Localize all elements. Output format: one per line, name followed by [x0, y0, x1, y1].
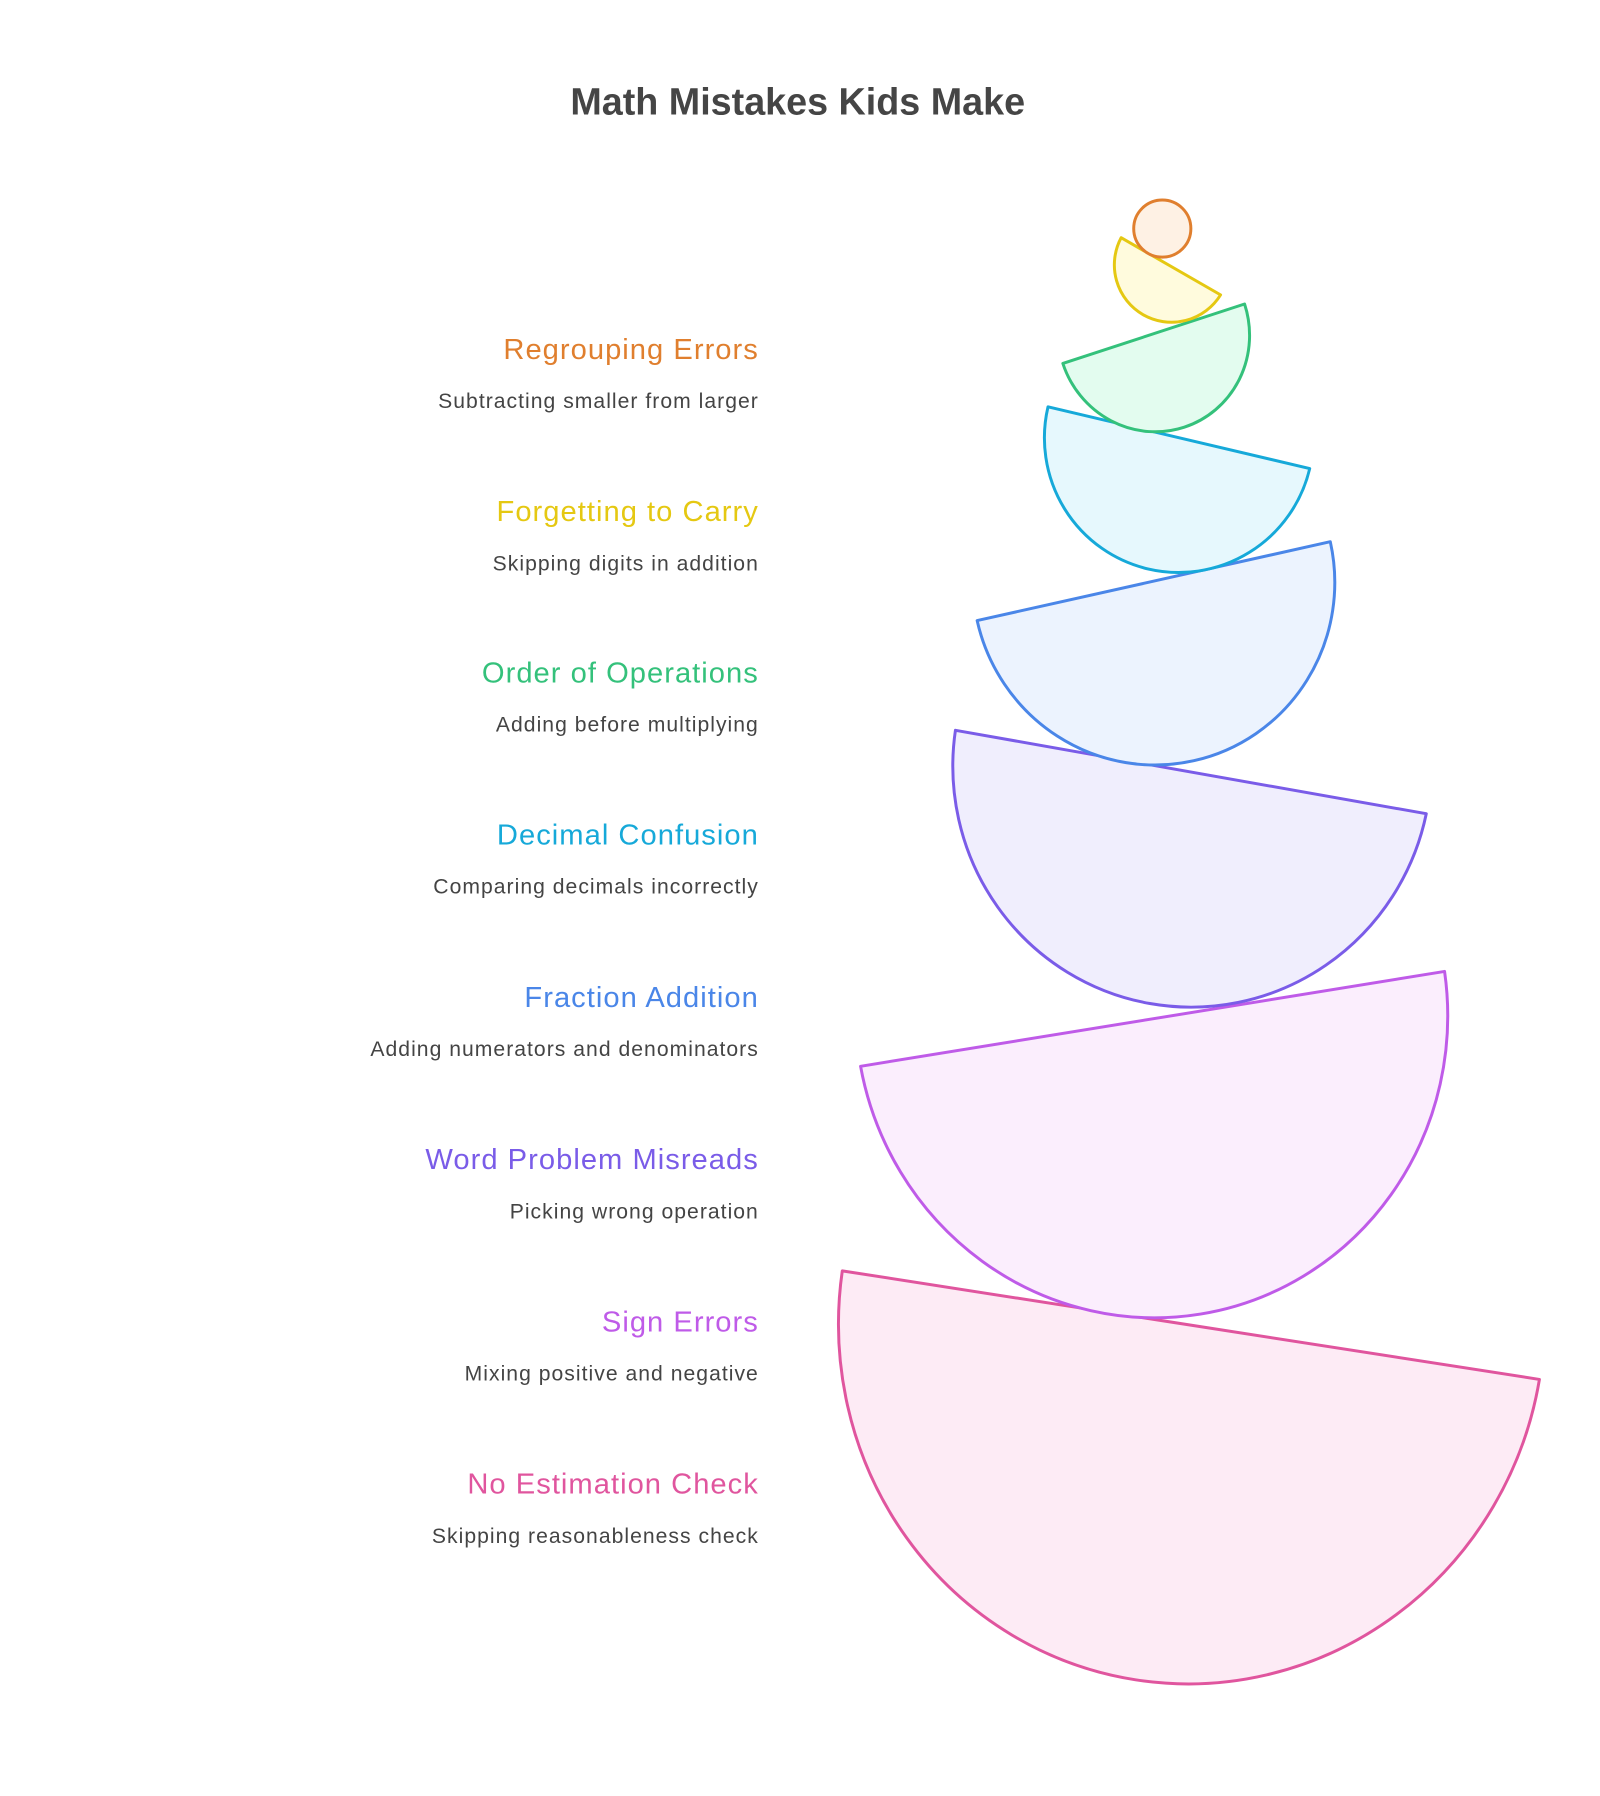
shape: magenta	[861, 971, 1448, 1318]
shape: pink base	[838, 1271, 1539, 1684]
label: decimal: Decimal Confusion	[497, 820, 759, 852]
label: decimal: Comparing decimals incorrectly	[433, 876, 759, 899]
label: estimation	[432, 1469, 759, 1548]
label: fraction	[370, 982, 759, 1061]
label: decimal	[433, 820, 759, 899]
label: carry	[493, 496, 759, 575]
label: regrouping	[438, 334, 759, 413]
label: word problem: Picking wrong operation	[510, 1200, 759, 1223]
label: regrouping: Regrouping Errors	[503, 334, 759, 366]
label: estimation: Skipping reasonableness check	[432, 1525, 759, 1548]
labels	[370, 334, 759, 1548]
label: carry: Skipping digits in addition	[493, 552, 759, 575]
label: regrouping: Subtracting smaller from larger	[438, 390, 759, 413]
shape: green	[1063, 304, 1250, 432]
shape: purple	[953, 730, 1426, 1007]
shape: orange circle	[1134, 200, 1191, 257]
label: order: Order of Operations	[482, 657, 759, 689]
shape: yellow	[1114, 238, 1221, 322]
label: fraction: Adding numerators and denominators	[370, 1038, 759, 1061]
label: word problem	[425, 1144, 759, 1223]
shape: cyan	[1044, 407, 1310, 572]
label: order	[482, 657, 759, 736]
label: word problem: Word Problem Misreads	[425, 1144, 759, 1176]
label: sign	[465, 1306, 759, 1386]
label: sign: Sign Errors	[602, 1306, 759, 1338]
label: order: Adding before multiplying	[496, 713, 759, 736]
label: estimation: No Estimation Check	[467, 1469, 759, 1501]
shape: blue	[977, 542, 1335, 765]
stacked shapes	[838, 200, 1539, 1684]
label: carry: Forgetting to Carry	[497, 496, 759, 528]
label: sign: Mixing positive and negative	[465, 1363, 759, 1386]
label: fraction: Fraction Addition	[524, 982, 759, 1014]
title: Math Mistakes Kids Make	[570, 80, 1025, 122]
